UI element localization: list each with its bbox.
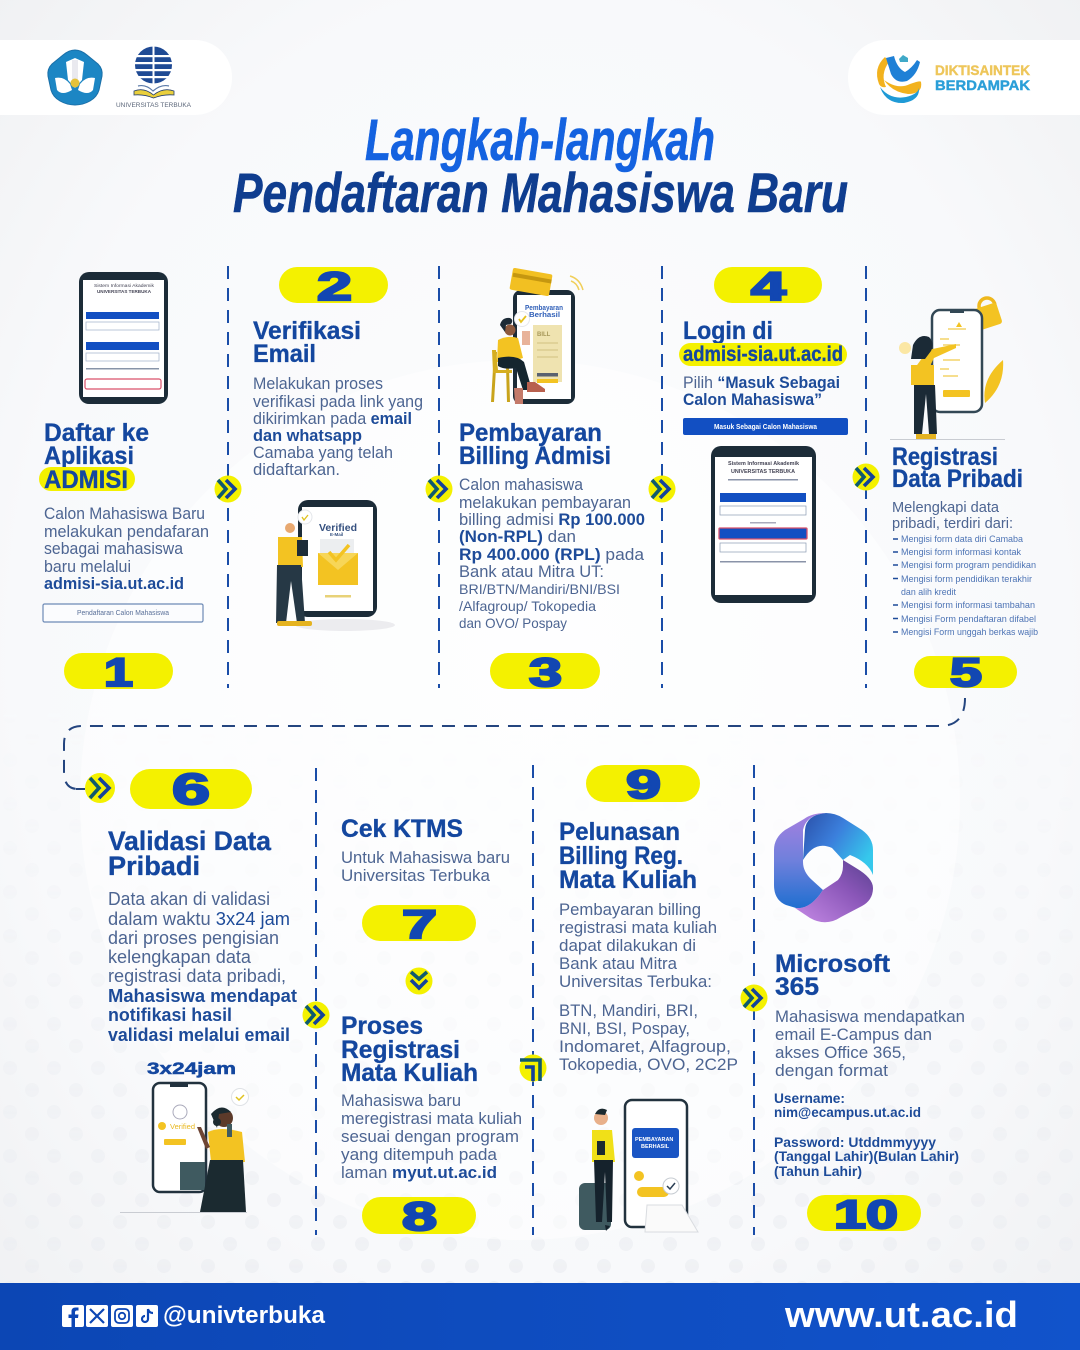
button: [683, 418, 848, 435]
icon: tablet login: [711, 446, 816, 603]
panel: step 6: [108, 765, 297, 1212]
heading: [459, 419, 611, 470]
heading: ADMISI: [44, 466, 128, 494]
heading: Data Pribadi: [892, 465, 1023, 493]
body text: Rp 400.000 (RPL) pada: [459, 546, 645, 564]
body text: dan OVO/ Pospay: [459, 615, 567, 631]
body text: Universitas Terbuka: [341, 867, 491, 885]
body text: Bank atau Mitra: [559, 955, 678, 973]
icon: phone with ADMISI login: [79, 272, 168, 404]
body text: Calon Mahasiswa Baru: [44, 505, 205, 523]
body text: Data akan di validasi: [108, 889, 270, 909]
credential format: Password: Utddmmyyyy: [774, 1134, 936, 1150]
heading: Validasi Data: [108, 826, 272, 856]
heading: [679, 317, 847, 366]
panel: step 1: [39, 272, 209, 695]
heading: admisi-sia.ut.ac.id: [683, 343, 843, 366]
panel: step 3: [459, 268, 645, 695]
heading: Daftar ke: [44, 419, 149, 447]
body text: dalam waktu 3x24 jam: [108, 909, 290, 929]
body text: Pembayaran billing: [559, 901, 701, 919]
body text: dapat dilakukan di: [559, 937, 696, 955]
body text: Universitas Terbuka:: [559, 973, 712, 991]
panel: step 7: [341, 815, 510, 947]
number badge 2: 2: [317, 265, 352, 309]
heading: Login di: [683, 317, 773, 345]
title: Langkah-langkah: [365, 108, 715, 173]
heading: Mata Kuliah: [341, 1059, 478, 1087]
icon: Universitas Terbuka: UNIVERSITAS TERBUKA: [116, 102, 192, 109]
illustration: verified woman: Verified: [170, 1122, 195, 1131]
number badge 5: [914, 651, 1017, 695]
list of forms: Mengisi Form unggah berkas wajib: [901, 627, 1038, 638]
body text: verifikasi pada link yang: [253, 393, 423, 411]
body text: [108, 889, 297, 1045]
body text: registrasi mata kuliah: [559, 919, 717, 937]
arrow: 3 to 4: [648, 476, 676, 502]
body text: dikirimkan pada email: [253, 410, 412, 428]
arrow: 7 to 8: [406, 968, 432, 994]
body text: notifikasi hasil: [108, 1005, 232, 1025]
body text: kelengkapan data: [108, 947, 252, 967]
body text: [341, 1092, 522, 1182]
illustration: verified email: E-Mail: [330, 532, 343, 537]
number badge 6: 6: [172, 765, 210, 814]
icon: Diktisaintek: [877, 55, 921, 103]
number badge 5: 5: [950, 651, 982, 695]
label 3x24 jam: 3x24jam: [147, 1059, 236, 1078]
body text: Camaba yang telah: [253, 444, 393, 462]
body text: Mahasiswa mendapat: [108, 986, 297, 1006]
icon: tablet login: Sistem Informasi Akademik: [728, 461, 800, 467]
illustration: payment success: Berhasil: [529, 312, 560, 319]
body text: [459, 476, 645, 631]
heading: [775, 950, 891, 1001]
icon: instagram: [111, 1305, 133, 1327]
body text: validasi melalui email: [108, 1025, 290, 1045]
body text: dengan format: [775, 1062, 888, 1080]
number badge 8: 8: [402, 1195, 437, 1239]
background: [4, 1237, 1073, 1283]
title: Pendaftaran Mahasiswa Baru: [233, 161, 848, 224]
body text: laman myut.ut.ac.id: [341, 1164, 497, 1182]
body text: dari proses pengisian: [108, 928, 279, 948]
credential format: nim@ecampus.ut.ac.id: [774, 1104, 921, 1120]
body text: sebagai mahasiswa: [44, 540, 184, 558]
body text: billing admisi Rp 100.000: [459, 511, 645, 529]
social handle: @univterbuka: [163, 1302, 326, 1329]
number badge 1: [64, 651, 173, 695]
icon: Universitas Terbuka: [116, 46, 192, 109]
credential format: Username:: [774, 1090, 845, 1106]
body text: sesuai dengan program: [341, 1128, 519, 1146]
list of forms: Mengisi form data diri Camaba: [901, 534, 1024, 545]
icon: facebook: [62, 1305, 84, 1327]
footer: [0, 1283, 1080, 1350]
panel: step 10: [774, 813, 965, 1237]
button: Masuk Sebagai Calon Mahasiswa: [714, 424, 817, 431]
heading: [108, 826, 272, 881]
body text: [559, 901, 738, 1074]
body text: registrasi data pribadi,: [108, 966, 286, 986]
panel: right logo: DIKTISAINTEK: [935, 63, 1030, 78]
body text: [775, 1008, 965, 1080]
heading: Mata Kuliah: [559, 866, 697, 894]
list of forms: Mengisi Form pendaftaran difabel: [901, 614, 1036, 625]
illustration: verified email: [276, 500, 395, 631]
body text: didaftarkan.: [253, 461, 340, 479]
body text: melakukan pendafaran: [44, 523, 209, 541]
icon: Microsoft 365 logo: [774, 813, 873, 922]
body text: Mahasiswa mendapatkan: [775, 1008, 965, 1026]
list of forms: Mengisi form program pendidikan: [901, 560, 1036, 571]
heading: [892, 443, 1023, 493]
arrow: 6 to 7: [302, 1002, 330, 1028]
icon: X: [86, 1305, 108, 1327]
number badge 3: 3: [529, 651, 562, 695]
illustration: verified woman: [120, 1083, 248, 1212]
body text: BTN, Mandiri, BRI,: [559, 1002, 698, 1020]
heading: Aplikasi: [44, 442, 134, 470]
number badge 6: [130, 765, 252, 814]
heading: Billing Admisi: [459, 442, 611, 470]
number badge 4: 4: [751, 265, 787, 309]
list of forms: Mengisi form informasi kontak: [901, 547, 1021, 558]
illustration: man with payment phone: BERHASIL: [641, 1144, 670, 1150]
illustration: verified email: Verified: [319, 523, 357, 534]
body text: dan whatsapp: [253, 427, 362, 445]
illustration: payment success: Pembayaran: [525, 305, 563, 312]
illustration: woman with phone form: [890, 298, 1005, 440]
number badge 7: [362, 903, 476, 947]
panel: right logo: [848, 40, 1080, 115]
body text: baru melalui: [44, 558, 131, 576]
panel: step 5: [890, 298, 1038, 695]
body text: Calon mahasiswa: [459, 476, 584, 494]
body text: Untuk Mahasiswa baru: [341, 849, 510, 867]
heading: Pembayaran: [459, 419, 602, 447]
number badge 1: 1: [104, 651, 133, 695]
body text: yang ditempuh pada: [341, 1146, 498, 1164]
arrow: 4 to 5: [852, 464, 880, 490]
heading: Microsoft: [775, 950, 891, 978]
heading: [253, 317, 361, 368]
arrow: connector from row 1 to row 2: [64, 698, 965, 803]
body text: Melakukan proses: [253, 375, 383, 393]
body text: admisi-sia.ut.ac.id: [44, 575, 184, 593]
body text: [892, 499, 1013, 532]
number badge 10: 10: [834, 1193, 898, 1237]
panel: step 2: [253, 265, 423, 631]
body text: [44, 505, 209, 593]
body text: /Alfagroup/ Tokopedia: [459, 598, 596, 614]
dashed dividers row 1: [228, 266, 866, 688]
panel: step 4: [679, 265, 848, 603]
body text: melakukan pembayaran: [459, 494, 631, 512]
illustration: payment success: [491, 268, 583, 404]
list of forms: [893, 534, 1038, 638]
body text: Mahasiswa baru: [341, 1092, 461, 1110]
panel: step 9: [559, 763, 738, 1232]
number badge 2: [279, 265, 388, 309]
icon: Kemdikbud shield: [48, 50, 102, 105]
arrow: 2 to 3: [426, 476, 452, 502]
heading: [341, 1012, 478, 1087]
panel: left logos: [0, 40, 232, 115]
heading: Registrasi: [892, 443, 998, 471]
body text: Bank atau Mitra UT:: [459, 563, 604, 581]
heading: Pelunasan: [559, 818, 680, 846]
panel: right logo: BERDAMPAK: [935, 77, 1030, 93]
panel: step 8: [341, 1012, 522, 1239]
body text: [341, 849, 510, 885]
heading: Cek KTMS: [341, 815, 463, 843]
credential format: (Tanggal Lahir)(Bulan Lahir): [774, 1148, 959, 1164]
icon: phone with ADMISI login: Sistem Informasi Akademik: [94, 283, 155, 288]
button: Pendaftaran Calon Mahasiswa: [77, 610, 169, 617]
credential format: [774, 1090, 959, 1179]
body text: email E-Campus dan: [775, 1026, 932, 1044]
number badge 4: [714, 265, 822, 309]
number badge 7: 7: [402, 903, 437, 947]
number badge 10: [807, 1193, 921, 1237]
title: [233, 108, 848, 224]
body text: (Non-RPL) dan: [459, 528, 576, 546]
body text: Melengkapi data: [892, 499, 1000, 516]
body text: Indomaret, Alfagroup,: [559, 1038, 731, 1056]
illustration: man with payment phone: PEMBAYARAN: [635, 1137, 673, 1143]
list of forms: dan alih kredit: [901, 587, 956, 598]
arrow: 9 to 10: [740, 984, 768, 1012]
heading: 365: [775, 973, 819, 1001]
number badge 8: [362, 1195, 476, 1239]
heading: [559, 818, 697, 894]
heading: Billing Reg.: [559, 842, 683, 870]
list of forms: Mengisi form informasi tambahan: [901, 600, 1035, 611]
arrow: 8 to 9: [520, 1054, 546, 1082]
credential format: (Tahun Lahir): [774, 1163, 862, 1179]
body text: BNI, BSI, Pospay,: [559, 1020, 690, 1038]
heading: Verifikasi: [253, 317, 361, 345]
number badge 3: [490, 651, 600, 695]
number badge 9: 9: [626, 763, 661, 807]
illustration: man with payment phone: [579, 1100, 698, 1232]
body text: BRI/BTN/Mandiri/BNI/BSI: [459, 581, 620, 597]
heading: Pribadi: [108, 851, 200, 881]
list of forms: Mengisi form pendidikan terakhir: [901, 574, 1032, 585]
body text: [683, 374, 840, 409]
illustration: payment success: BILL: [537, 332, 551, 338]
body text: [253, 375, 423, 479]
body text: Calon Mahasiswa”: [683, 391, 822, 409]
body text: akses Office 365,: [775, 1044, 906, 1062]
dashed dividers row 2: [316, 765, 754, 1235]
icon: tiktok: [136, 1305, 158, 1327]
heading: Email: [253, 340, 316, 368]
body text: pribadi, terdiri dari:: [892, 515, 1013, 532]
body text: Tokopedia, OVO, 2C2P: [559, 1056, 738, 1074]
heading: Proses: [341, 1012, 423, 1040]
icon: phone with ADMISI login: UNIVERSITAS TERBUKA: [97, 289, 152, 294]
icon: tablet login: UNIVERSITAS TERBUKA: [731, 469, 795, 475]
body text: meregistrasi mata kuliah: [341, 1110, 522, 1128]
arrow: 1 to 2: [214, 476, 242, 502]
website: www.ut.ac.id: [784, 1294, 1018, 1335]
heading: Registrasi: [341, 1036, 460, 1064]
number badge 9: [586, 763, 700, 807]
heading: [39, 419, 149, 494]
body text: Pilih “Masuk Sebagai: [683, 374, 840, 392]
button: [43, 604, 203, 622]
